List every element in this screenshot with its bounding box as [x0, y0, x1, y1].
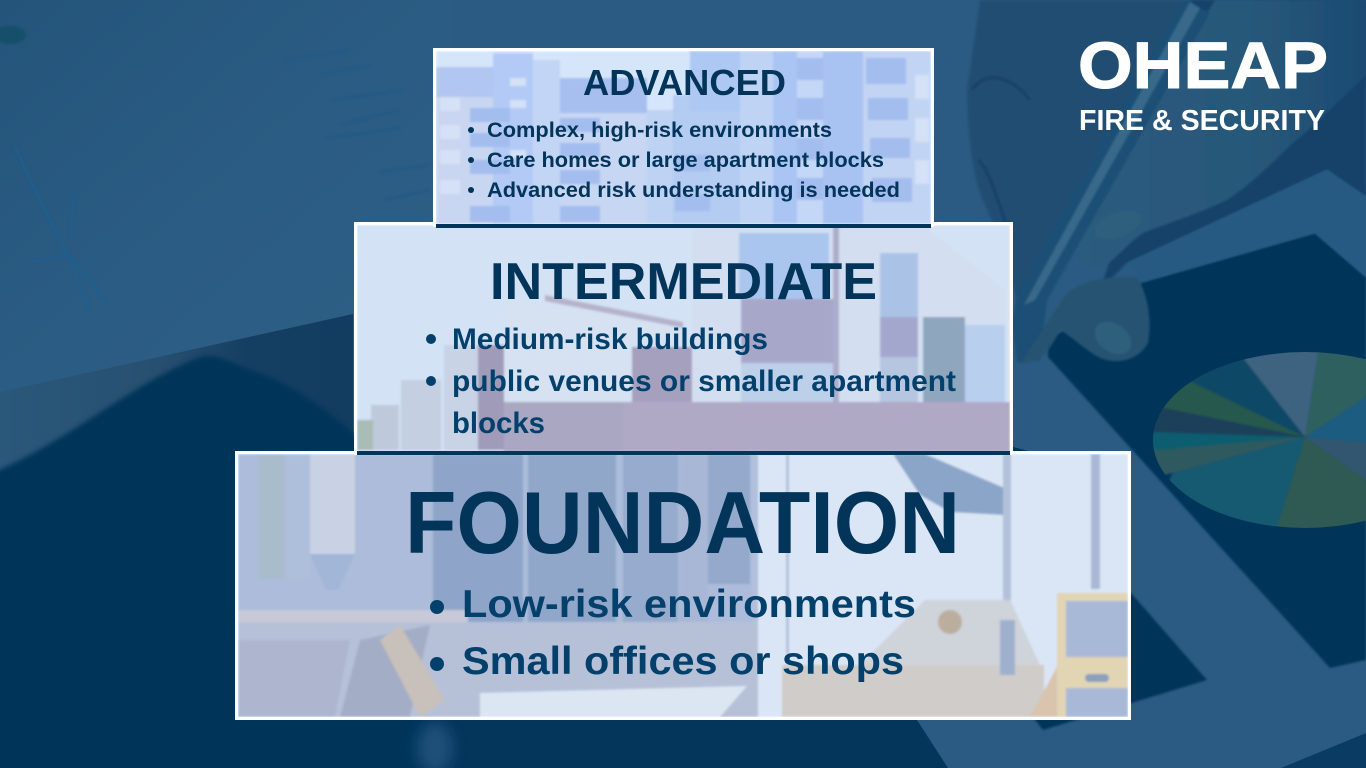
paper with chart and notes — [0, 0, 450, 392]
intermediate heading: INTERMEDIATE — [490, 253, 877, 311]
intermediate bullet list — [426, 323, 956, 440]
hand and pen — [967, 0, 1366, 364]
foundation heading: FOUNDATION — [405, 473, 960, 572]
panel: intermediate — [354, 222, 1013, 455]
pie chart — [1153, 352, 1366, 528]
advanced bullet list: Care homes or large apartment blocks — [487, 149, 884, 172]
intermediate bullet list: public venues or smaller apartment — [452, 365, 956, 398]
intermediate bullet list: Medium-risk buildings — [452, 323, 768, 356]
logo: OHEAP Fire & Security: FIRE & SECURITY — [1079, 105, 1325, 137]
intermediate photo: modern townhouses — [357, 225, 1010, 452]
advanced bullet list: Complex, high-risk environments — [487, 119, 832, 142]
foundation bullet list: Small offices or shops — [462, 640, 904, 683]
panel: foundation — [235, 451, 1131, 720]
wood desk band — [0, 314, 353, 480]
advanced photo: apartment tower — [436, 51, 931, 224]
foundation bullet list — [430, 583, 916, 683]
tablet screen — [1048, 233, 1366, 668]
advanced bullet list: Advanced risk understanding is needed — [487, 179, 900, 202]
foundation photo: cafe interior — [238, 454, 1128, 717]
top right dark wall and shadow — [1100, 0, 1366, 290]
advanced heading: ADVANCED — [583, 62, 786, 103]
intermediate bottom bar — [357, 451, 1010, 455]
panel: advanced — [433, 48, 934, 228]
intermediate bullet list: blocks — [452, 407, 545, 440]
logo: OHEAP Fire & Security — [1078, 28, 1328, 137]
foundation bullet list: Low-risk environments — [462, 583, 916, 626]
advanced bottom bar — [436, 224, 931, 228]
logo: OHEAP Fire & Security: OHEAP — [1078, 28, 1328, 102]
advanced bullet list — [468, 119, 900, 202]
tablet upper bezel — [1127, 170, 1366, 282]
dark laptop shape — [0, 356, 440, 768]
